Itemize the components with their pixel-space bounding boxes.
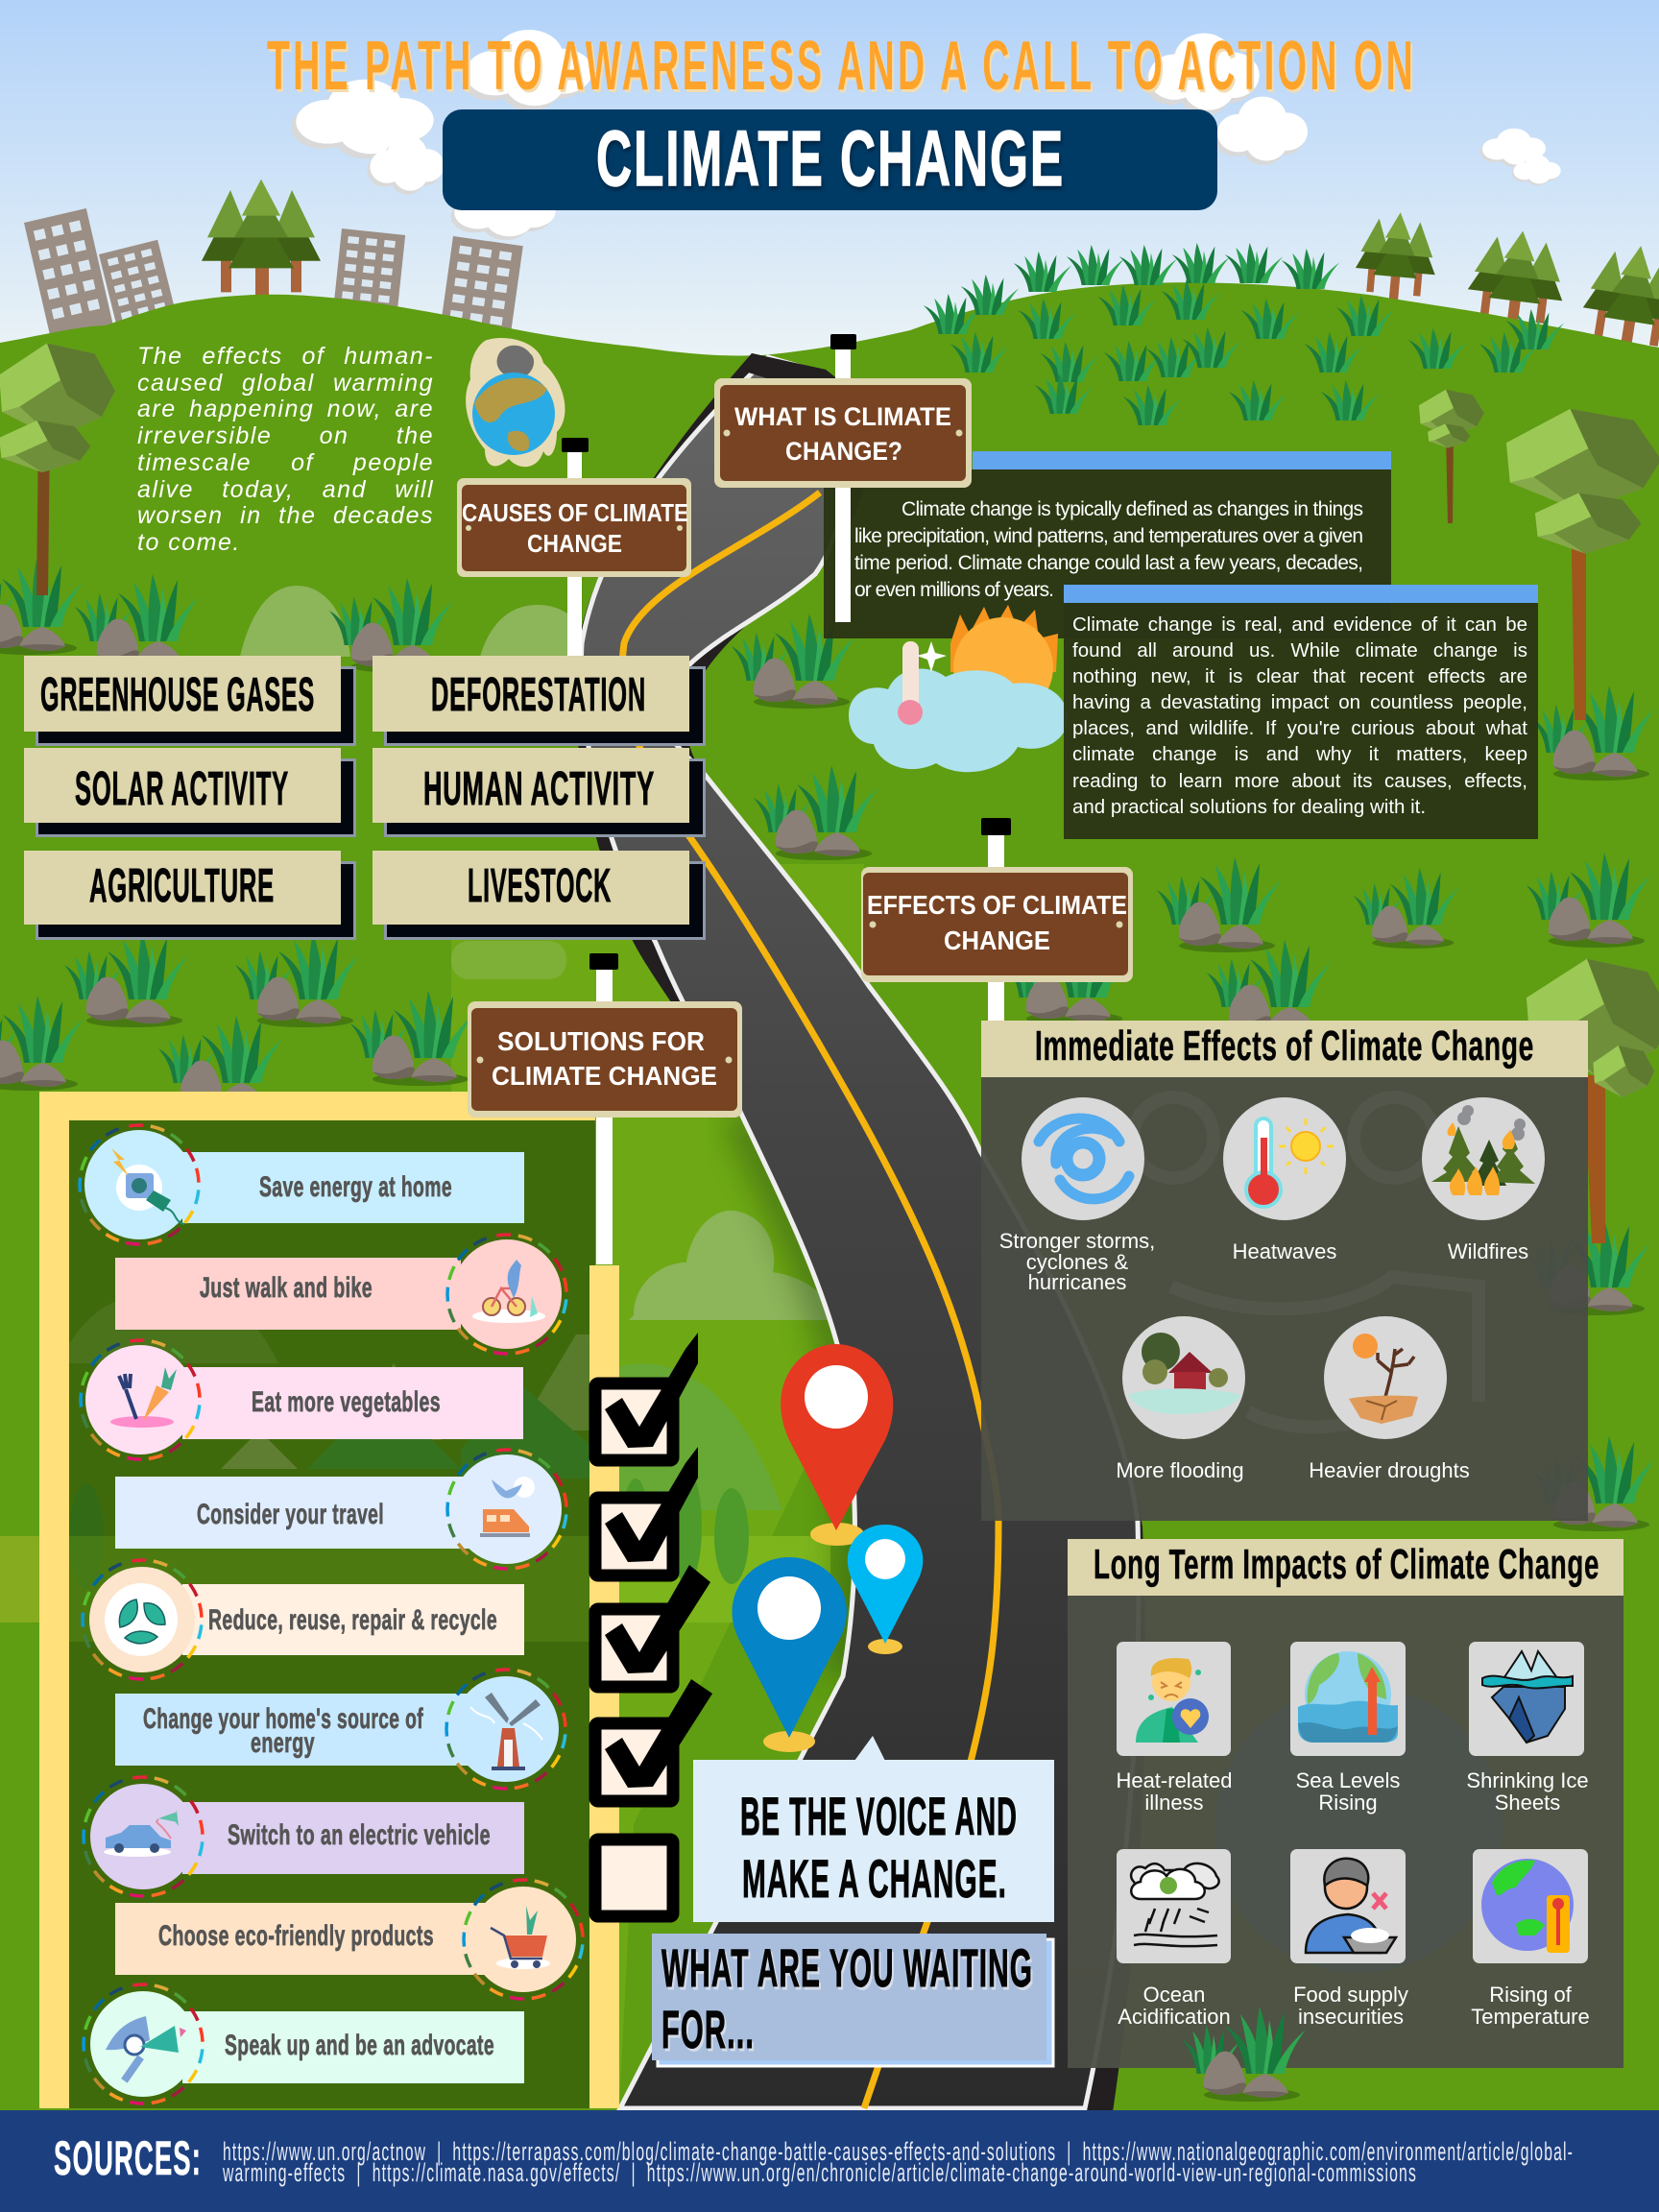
icon: melting earth: [466, 338, 565, 467]
title banner: [443, 109, 1217, 210]
rock at long-term panel bottom: [1182, 2007, 1306, 2102]
panel: what is climate change: time period. Climate change could last a few years, decades,: [854, 552, 1363, 574]
label: food insecurity: Food supply: [1293, 1983, 1408, 2007]
sign: solutions for climate change: SOLUTIONS FOR: [497, 1026, 705, 1056]
label: shrinking ice: Shrinking Ice: [1466, 1768, 1589, 1792]
label: wildfires: Wildfires: [1448, 1239, 1528, 1263]
cause boxes: SOLAR ACTIVITY: [75, 763, 289, 815]
climate change is real paragraph: nothing new, it is clear that recent effects are: [1072, 665, 1527, 687]
callout: be the voice: [693, 1736, 1054, 1922]
pine trees right: [1353, 209, 1659, 355]
title banner: CLIMATE CHANGE: [596, 115, 1065, 203]
icon: wildfire: [1422, 1097, 1545, 1220]
map pin blue: [733, 1557, 847, 1752]
label: rising temperature: Temperature: [1471, 2005, 1590, 2029]
label: heatwaves: Heatwaves: [1233, 1239, 1336, 1263]
sign: what is climate change: WHAT IS CLIMATE: [734, 402, 951, 431]
low-poly tree large right: [1506, 409, 1659, 720]
sign: effects of climate change: [861, 867, 1133, 982]
sign: solutions for climate change: CLIMATE CHANGE: [492, 1061, 717, 1091]
road: [574, 353, 1145, 2112]
icon: storm: [1022, 1097, 1144, 1220]
icon: heat-related illness: [1117, 1642, 1231, 1756]
label: sea levels: Rising: [1318, 1791, 1378, 1815]
panel: what is climate change: like precipitation, wind patterns, and temperatures over a given: [854, 525, 1363, 547]
cause boxes: HUMAN ACTIVITY: [423, 763, 655, 815]
sign post: what is climate change: [830, 334, 856, 622]
solution: walk and bike: Just walk and bike: [200, 1272, 373, 1304]
intro paragraph: alive today, and will: [137, 476, 434, 503]
buildings: [24, 208, 523, 347]
panel: long term impacts: [1068, 1539, 1623, 2068]
solution: be an advocate: Speak up and be an advocate: [225, 2030, 494, 2061]
solution: eco products: Choose eco-friendly products: [158, 1920, 434, 1952]
callout: what are you waiting for: [652, 1934, 1053, 2066]
checkbox 4: [595, 1679, 712, 1801]
hillside lighter patch: [451, 864, 864, 2108]
climate change is real paragraph: [1072, 613, 1527, 818]
climate change is real paragraph: climate change is and why it matters, keep: [1072, 743, 1527, 765]
map pin cyan: [848, 1525, 923, 1654]
sign post: effects: [981, 818, 1011, 1022]
climate change is real paragraph: places, and wildlife. If you're curious about what: [1072, 717, 1527, 739]
low-poly tree small right: [1419, 390, 1484, 523]
cause boxes: LIVESTOCK: [468, 860, 612, 912]
solution: reduce reuse: Reduce, reuse, repair & recycle: [208, 1604, 497, 1636]
solution: consider travel: [115, 1425, 591, 1594]
solution: walk and bike: [115, 1210, 591, 1379]
label: sea levels: Sea Levels: [1296, 1768, 1400, 1792]
sign: what is climate change: CHANGE?: [785, 437, 902, 466]
intro paragraph: to come.: [137, 529, 241, 556]
solution: home energy source: Change your home's source of: [143, 1703, 423, 1735]
panel: what is climate change: [824, 451, 1391, 638]
intro paragraph: [137, 343, 434, 556]
label: rising temperature: Rising of: [1489, 1983, 1573, 2007]
solution: eat vegetables: [56, 1315, 523, 1484]
sign: causes of climate change: [457, 478, 691, 577]
solution: save energy: Save energy at home: [259, 1171, 452, 1203]
sources footer: SOURCES:: [54, 2131, 202, 2185]
sources footer: [0, 2110, 1659, 2212]
panel: immediate effects: [981, 1021, 1588, 1521]
callout: what are you waiting for: FOR...: [661, 1999, 755, 2059]
cause boxes: GREENHOUSE GASES: [40, 669, 315, 721]
icon: drought: [1324, 1316, 1447, 1439]
climate change is real paragraph: reading to learn more about its causes, effects,: [1072, 770, 1527, 792]
label: food insecurity: insecurities: [1298, 2005, 1404, 2029]
label: shrinking ice: Sheets: [1495, 1791, 1560, 1815]
solution: eat vegetables: Eat more vegetables: [252, 1386, 441, 1418]
climate change is real paragraph: Climate change is real, and evidence of it can be: [1072, 613, 1527, 636]
solution: save energy: [55, 1100, 524, 1269]
checkbox 1: [595, 1333, 698, 1460]
icon: food insecurity: [1290, 1849, 1406, 1963]
icon: shrinking ice: [1469, 1642, 1584, 1756]
low-poly tree lower right: [1527, 959, 1659, 1243]
sign: effects of climate change: CHANGE: [944, 926, 1050, 955]
intro paragraph: timescale of people: [137, 449, 434, 476]
label: heat-related illness: illness: [1144, 1791, 1204, 1815]
sign post: causes: [562, 438, 589, 661]
intro paragraph: irreversible on the: [137, 422, 434, 449]
intro paragraph: caused global warming: [137, 370, 434, 397]
solution: consider travel: Consider your travel: [197, 1499, 384, 1530]
solution: electric vehicle: Switch to an electric vehicle: [228, 1819, 491, 1851]
pine trees left: [202, 180, 321, 300]
label: ocean acidification: Ocean: [1143, 1983, 1205, 2007]
solution: home energy source: energy: [251, 1727, 315, 1759]
intro paragraph: worsen in the decades: [137, 502, 434, 529]
sign: what is climate change: [714, 378, 972, 488]
sign post: solutions: [589, 953, 618, 1264]
climate change is real paragraph: having a devastating impact on countless people,: [1072, 691, 1527, 713]
icon: sea levels: [1290, 1642, 1406, 1756]
label: storms: hurricanes: [1028, 1270, 1126, 1294]
icon: thermometer sun and cloud: [849, 605, 1068, 772]
climate change is real paragraph: found all around us. While climate change is: [1072, 639, 1527, 661]
left edge pale band: [0, 1536, 39, 1623]
solution: home energy source: [115, 1645, 590, 1814]
intro paragraph: The effects of human-: [137, 343, 434, 370]
panel: solutions frame: [39, 1092, 619, 2108]
cause boxes: [24, 656, 705, 939]
road edge shade: [741, 1114, 855, 1676]
solution: electric vehicle: [59, 1752, 524, 1921]
label: flooding: More flooding: [1116, 1458, 1244, 1482]
checkbox 5 empty: [595, 1839, 673, 1916]
low-poly tree left: [0, 344, 115, 595]
rocks and grass clusters: [0, 560, 1655, 1531]
label: heat-related illness: Heat-related: [1116, 1768, 1233, 1792]
sign: solutions for climate change: [468, 1001, 742, 1118]
clouds: [291, 30, 1561, 240]
faded bush shapes: [240, 586, 845, 1320]
callout: be the voice: BE THE VOICE AND: [740, 1786, 1018, 1846]
panel: what is climate change: or even millions of years.: [854, 579, 1054, 601]
sign: effects of climate change: EFFECTS OF CLIMATE: [867, 890, 1127, 920]
icon: ocean acidification: [1117, 1849, 1231, 1963]
solution: reduce reuse: [58, 1535, 524, 1704]
sign: causes of climate change: CHANGE: [527, 529, 622, 558]
icon: heatwave: [1223, 1097, 1346, 1220]
climate change is real paragraph: and practical solutions for dealing with it.: [1072, 796, 1426, 818]
icon: flooding: [1122, 1316, 1245, 1439]
callout: what are you waiting for: WHAT ARE YOU WAITING: [661, 1937, 1033, 1998]
checkbox 3: [595, 1565, 710, 1687]
sky background: [0, 0, 1659, 365]
callout: be the voice: MAKE A CHANGE.: [742, 1848, 1007, 1909]
grass on right hill: [924, 243, 1564, 425]
label: storms: cyclones &: [1026, 1250, 1129, 1274]
panel: climate change is real: [1064, 585, 1538, 839]
cause boxes: DEFORESTATION: [431, 669, 646, 721]
intro paragraph: are happening now, are: [137, 396, 434, 422]
panel: what is climate change: Climate change is typically defined as changes in things: [902, 498, 1363, 520]
solution: be an advocate: [59, 1960, 524, 2128]
icon: rising temperature: [1473, 1849, 1588, 1963]
forest glow beside road: [619, 1363, 830, 1623]
checkbox 2: [595, 1447, 698, 1575]
label: droughts: Heavier droughts: [1309, 1458, 1470, 1482]
cause boxes: AGRICULTURE: [89, 860, 275, 912]
label: storms: Stronger storms,: [999, 1229, 1155, 1253]
map pin red: [781, 1344, 893, 1546]
label: ocean acidification: Acidification: [1118, 2005, 1231, 2029]
sign: causes of climate change: CAUSES OF CLIMATE: [462, 498, 688, 527]
solution: eco products: [115, 1855, 608, 2024]
